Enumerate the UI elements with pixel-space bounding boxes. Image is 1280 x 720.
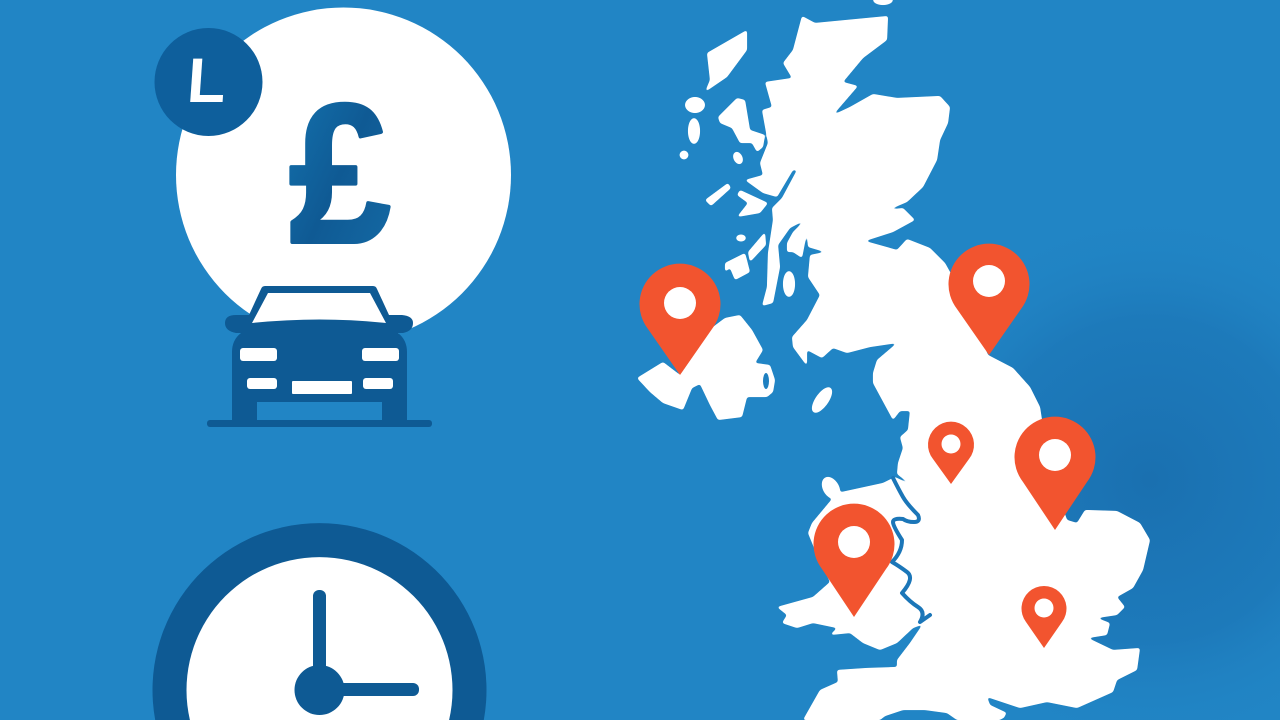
icon: car	[207, 286, 432, 427]
Isle of Man	[808, 384, 836, 416]
badge: learner L: L	[185, 46, 228, 116]
white circle	[176, 8, 511, 342]
Great Britain mainland	[745, 16, 1150, 720]
Anglesey	[818, 474, 844, 502]
Northern Ireland	[637, 315, 775, 420]
pin: Manchester area	[928, 422, 974, 484]
badge: learner L	[154, 28, 262, 136]
Isle of Wight	[981, 712, 1005, 720]
pin: Northern Ireland	[639, 264, 720, 375]
river Severn and Dee	[892, 478, 930, 622]
Scottish islands	[680, 0, 893, 297]
location pins	[639, 244, 1096, 648]
pin: north east England	[949, 244, 1030, 355]
landmasses	[637, 0, 1150, 720]
icon: clock	[152, 523, 487, 720]
pound symbol: £	[289, 64, 391, 285]
panel: cost of driving icon	[154, 8, 511, 427]
pin: London area	[1022, 586, 1066, 648]
pin: Lincolnshire area	[1014, 417, 1096, 530]
map: United Kingdom	[637, 0, 1150, 720]
Lough Neagh	[763, 373, 769, 389]
pin: Wales	[814, 504, 894, 617]
